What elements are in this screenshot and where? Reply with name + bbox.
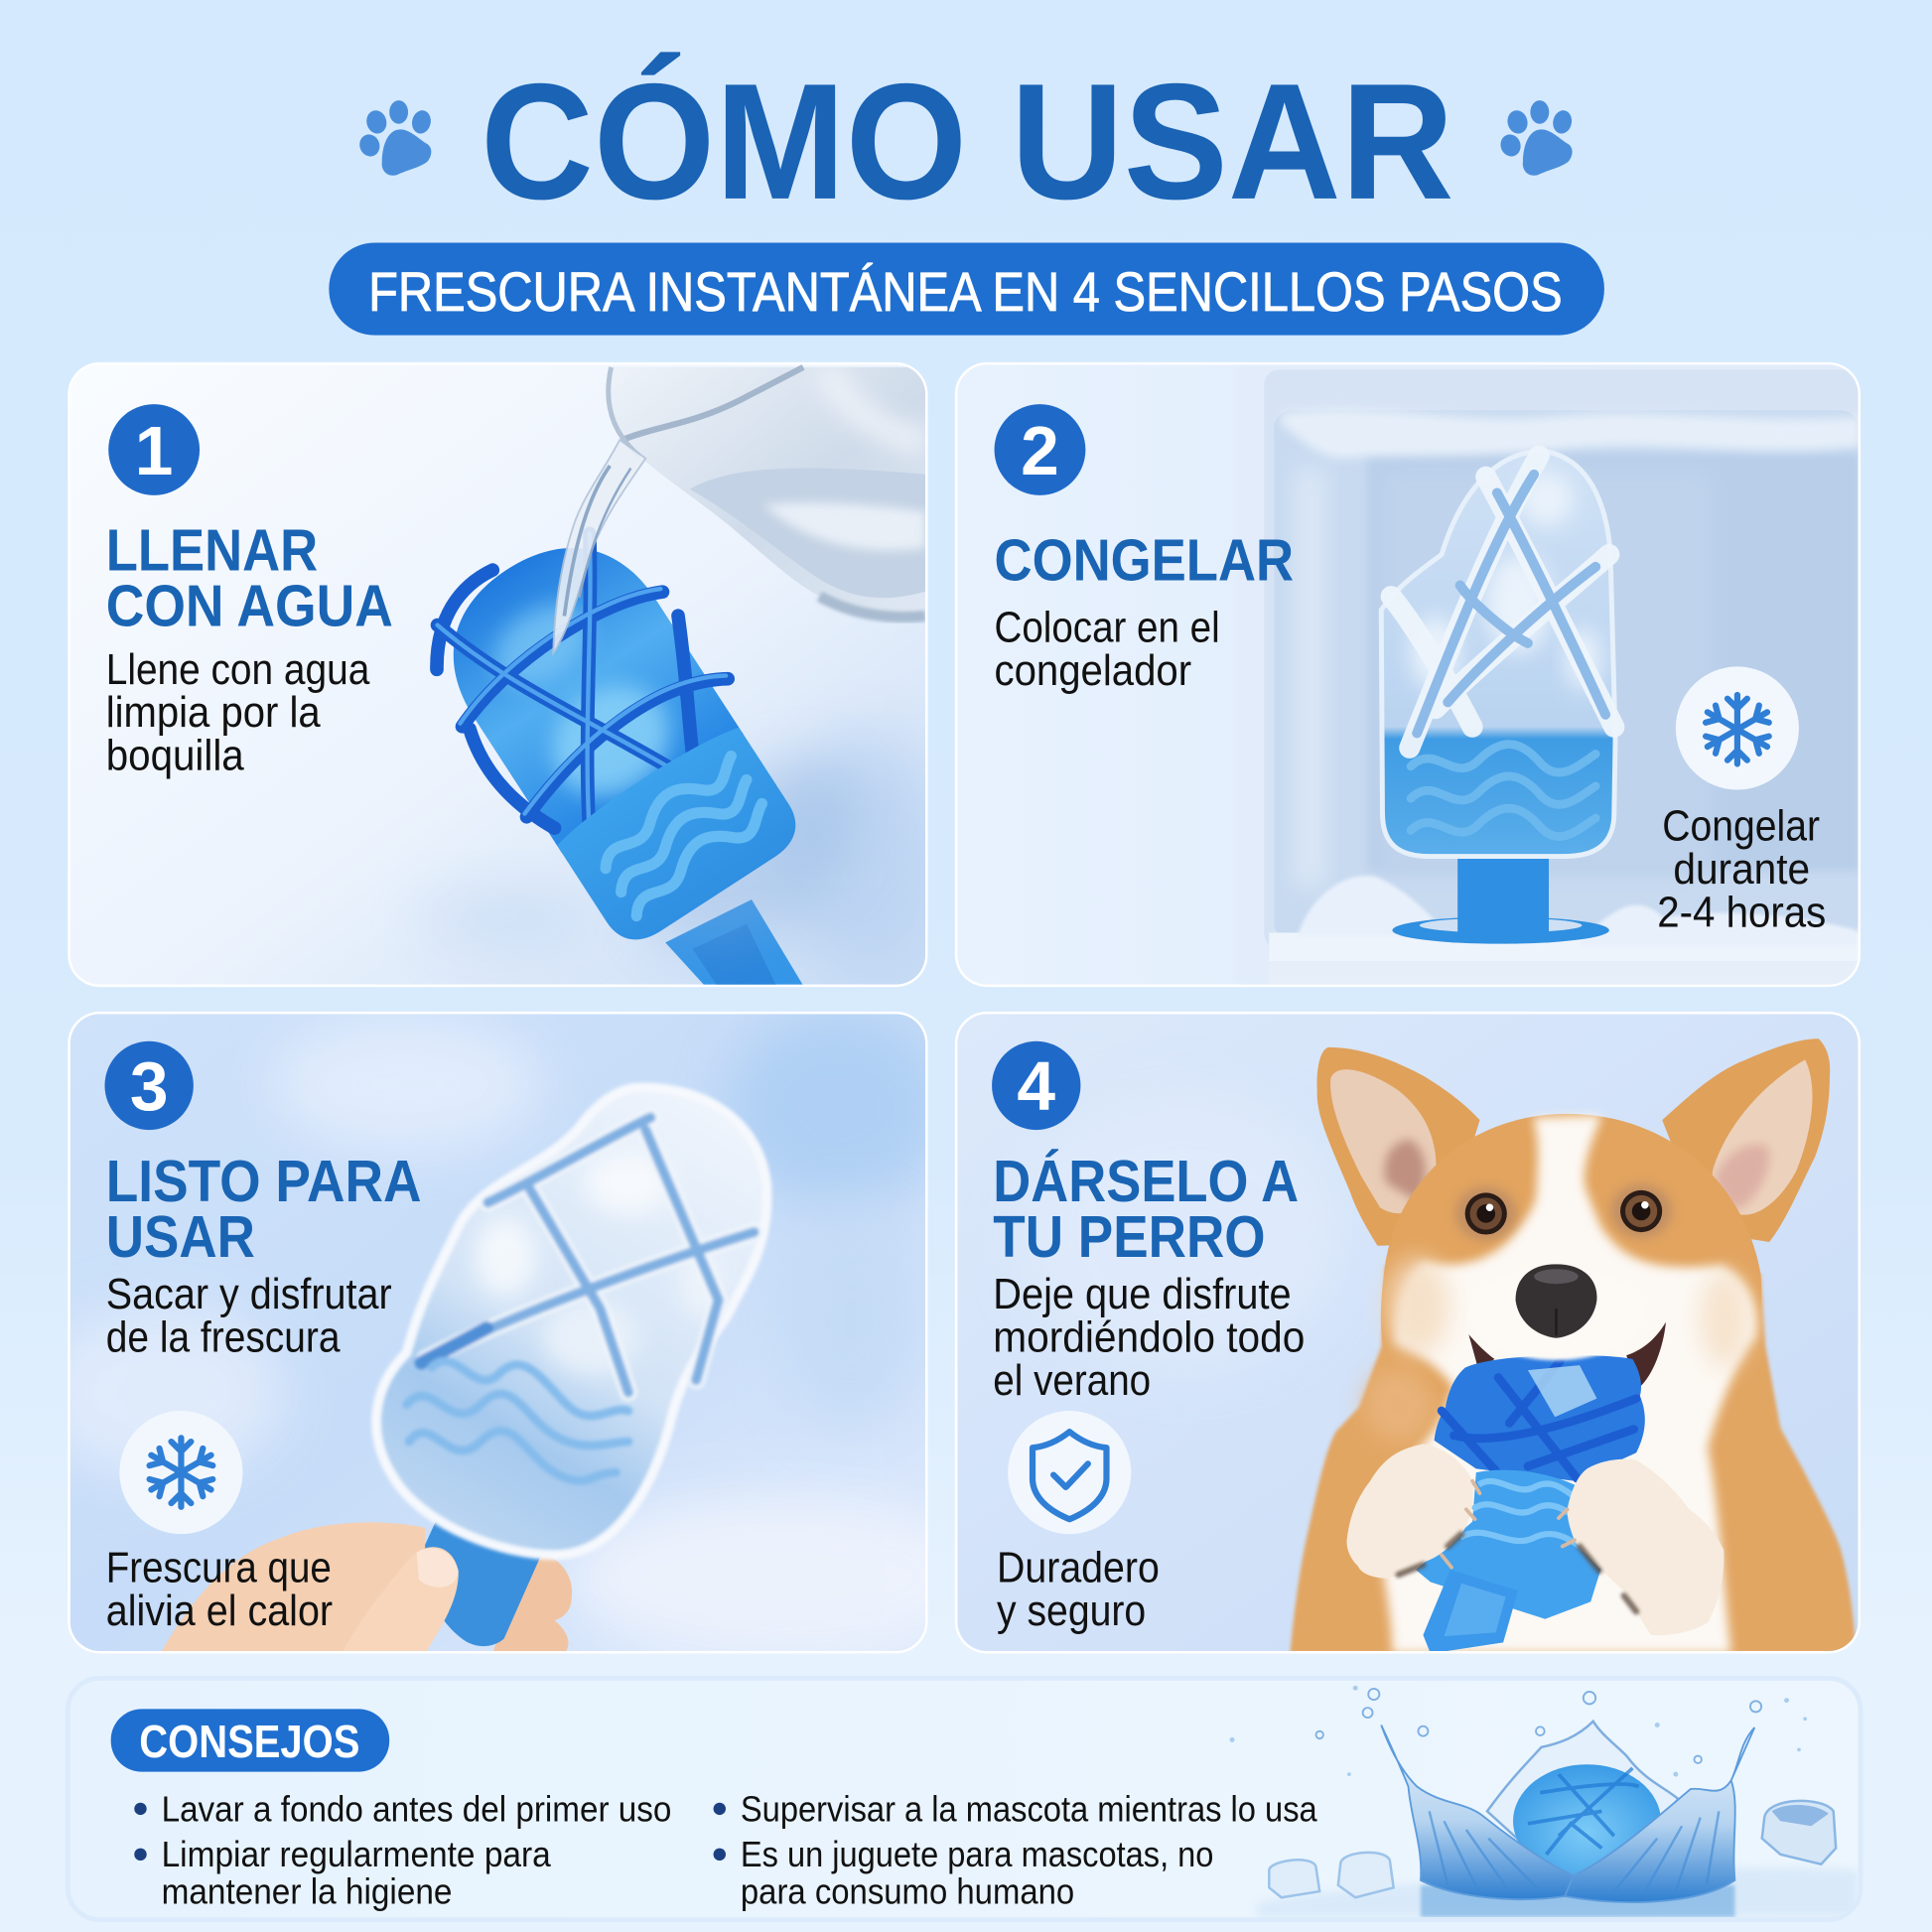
description: el verano xyxy=(993,1357,1151,1405)
title: CÓMO USAR xyxy=(481,50,1453,234)
heading xyxy=(993,1148,1299,1270)
durability note xyxy=(997,1545,1160,1635)
subtitle pill: FRESCURA INSTANTÁNEA EN 4 SENCILLOS PASOS xyxy=(368,260,1563,323)
step number 2: 2 xyxy=(1021,412,1059,489)
dog body fur xyxy=(1290,1266,1856,1654)
illustration: frozen popsicle xyxy=(1381,451,1615,944)
description: Deje que disfrute xyxy=(993,1271,1292,1318)
step number 4 xyxy=(992,1041,1080,1130)
illustration: ice cubes xyxy=(1269,1801,1836,1897)
durability note: Duradero xyxy=(997,1545,1160,1592)
step number 3: 3 xyxy=(130,1047,168,1125)
dog nose xyxy=(1516,1264,1597,1338)
tips list: right column xyxy=(714,1788,1318,1911)
illustration: corgi with toy xyxy=(1290,1038,1856,1654)
dog paws xyxy=(1346,1445,1724,1635)
hand xyxy=(160,1522,459,1654)
step number 1: 1 xyxy=(135,412,173,489)
dog muzzle xyxy=(1515,1355,1602,1363)
header xyxy=(329,50,1604,336)
description: boquilla xyxy=(106,733,245,780)
step number 3 xyxy=(104,1041,194,1130)
illustration: popsicle mould xyxy=(430,526,868,957)
description xyxy=(106,646,370,780)
hand behind stick xyxy=(492,1554,572,1654)
durability note: y seguro xyxy=(997,1587,1146,1635)
freeze time note: durante xyxy=(1673,846,1810,894)
heading: CON AGUA xyxy=(106,572,393,638)
panel: step 1 fill with water xyxy=(68,362,949,1012)
freeze time note: 2-4 horas xyxy=(1657,889,1826,936)
tips list: right column: Supervisar a la mascota mientras lo usa xyxy=(741,1788,1318,1829)
tips list: left column: Lavar a fondo antes del primer uso xyxy=(162,1788,671,1829)
heading: LISTO PARA xyxy=(106,1148,421,1214)
step number 4: 4 xyxy=(1017,1047,1055,1125)
description: limpia por la xyxy=(106,689,321,737)
freeze time note xyxy=(1657,802,1826,936)
subtitle pill xyxy=(329,242,1604,336)
dog mouth xyxy=(1468,1322,1666,1390)
dog right ear xyxy=(1662,1038,1830,1242)
toy in mouth xyxy=(1416,1355,1645,1654)
panel: step 3 ready xyxy=(37,1011,986,1657)
heading: DÁRSELO A xyxy=(993,1148,1299,1214)
illustration: frozen popsicle held in hand xyxy=(376,1088,767,1646)
description xyxy=(995,605,1220,695)
description: Llene con agua xyxy=(106,646,370,694)
tips list: right column: para consumo humano xyxy=(741,1870,1074,1911)
description: Sacar y disfrutar xyxy=(106,1271,392,1318)
illustration: popsicle stick xyxy=(665,899,803,986)
heading xyxy=(106,1148,421,1270)
heading xyxy=(106,517,393,638)
dog eyes xyxy=(1455,1184,1672,1241)
illustration: water splash crown xyxy=(1230,1686,1859,1917)
tips list: left column: Limpiar regularmente para xyxy=(162,1834,552,1874)
heading: LLENAR xyxy=(106,517,318,584)
icon: snowflake xyxy=(1676,666,1799,790)
tips list: left column xyxy=(134,1788,671,1911)
dog head xyxy=(1380,1114,1761,1349)
icon: left paw xyxy=(356,100,433,176)
panel: step 2 freeze xyxy=(955,362,1861,987)
icon: snowflake xyxy=(119,1411,242,1534)
description: Colocar en el xyxy=(995,605,1220,652)
freezer interior xyxy=(1235,364,1861,986)
panel: step 4 give to dog xyxy=(955,1012,1861,1654)
heading: CONGELAR xyxy=(995,527,1294,594)
description: de la frescura xyxy=(106,1313,341,1361)
water stream xyxy=(553,440,645,653)
panel: tips xyxy=(68,1678,1861,1920)
step number 1 xyxy=(108,404,200,495)
description xyxy=(993,1271,1305,1405)
coolness note: Frescura que xyxy=(106,1545,332,1592)
icon: shield check xyxy=(1008,1411,1131,1534)
icon: glass pitcher xyxy=(609,367,925,619)
dog left ear xyxy=(1317,1047,1480,1246)
coolness note xyxy=(106,1545,333,1635)
description: congelador xyxy=(995,647,1191,695)
heading: TU PERRO xyxy=(993,1203,1266,1270)
tips label: CONSEJOS xyxy=(139,1716,359,1767)
icon: right paw xyxy=(1497,100,1574,176)
freeze time note: Congelar xyxy=(1662,802,1820,850)
step number 2 xyxy=(995,404,1085,495)
tips list: right column: Es un juguete para mascotas, no xyxy=(741,1834,1213,1874)
description: mordiéndolo todo xyxy=(993,1313,1305,1361)
coolness note: alivia el calor xyxy=(106,1587,333,1635)
dog white blaze, muzzle and chest xyxy=(1379,1115,1756,1654)
description xyxy=(106,1271,392,1361)
heading: USAR xyxy=(106,1203,255,1270)
tips list: left column: mantener la higiene xyxy=(162,1870,452,1911)
